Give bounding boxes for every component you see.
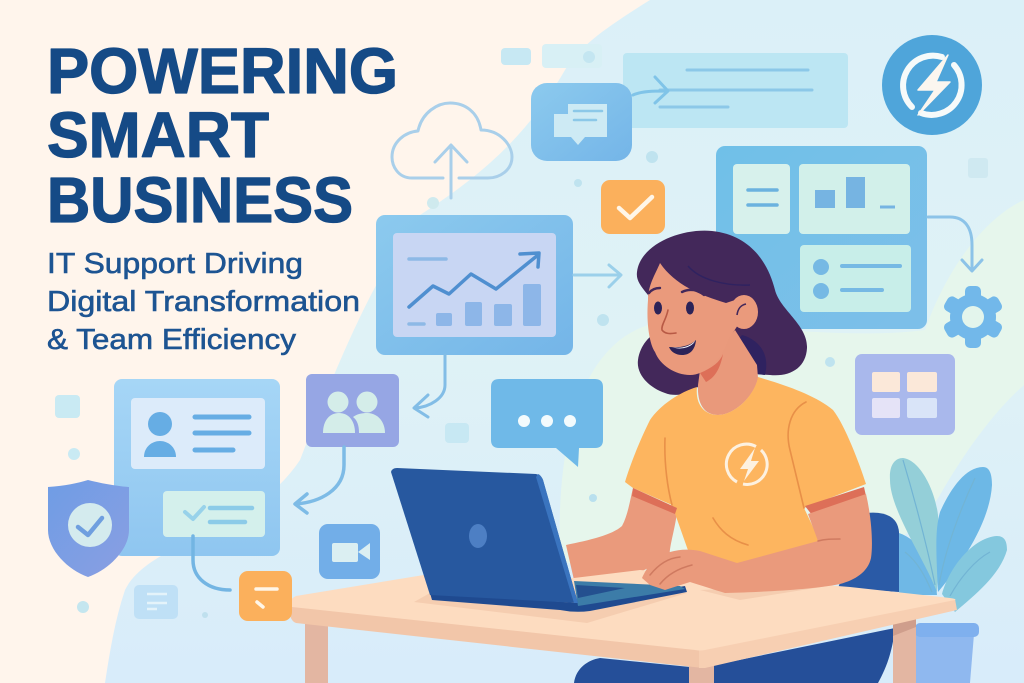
top message box bbox=[623, 53, 848, 128]
icon: small document bbox=[134, 585, 178, 619]
icon: layout grid bbox=[855, 354, 955, 435]
arrow: team to card bbox=[295, 447, 344, 513]
title: POWERING bbox=[47, 35, 398, 107]
arrow: chart to person bbox=[574, 265, 621, 287]
title: SMART bbox=[47, 99, 269, 171]
icon: shirt logo bbox=[726, 444, 767, 484]
panel: dashboard bbox=[716, 146, 927, 329]
icon: brand logo bbox=[882, 35, 982, 135]
decorative small shapes bbox=[55, 44, 988, 618]
title: BUSINESS bbox=[47, 164, 353, 236]
icon: shield bbox=[48, 480, 129, 577]
small orange tile bbox=[239, 571, 292, 621]
icon: chat tile bbox=[531, 83, 632, 161]
hair back bbox=[637, 231, 807, 395]
panel: growth chart bbox=[376, 215, 573, 355]
desk bbox=[290, 570, 957, 683]
person bbox=[566, 231, 866, 580]
subtitle: IT Support Driving bbox=[47, 248, 303, 280]
t-shirt bbox=[625, 377, 866, 568]
chair bbox=[574, 513, 899, 683]
laptop bbox=[391, 468, 687, 612]
icon: orange check bbox=[601, 180, 665, 234]
icon: team bbox=[306, 374, 399, 447]
title bbox=[47, 35, 398, 236]
icon: video bbox=[319, 524, 380, 579]
face bbox=[647, 263, 740, 375]
arrow: chart to team bbox=[414, 355, 445, 417]
subtitle: & Team Efficiency bbox=[47, 324, 297, 356]
icon: gear bbox=[942, 286, 1004, 348]
arrow: dashboard to gear bbox=[928, 217, 982, 271]
subtitle bbox=[47, 248, 360, 356]
panel: profile card bbox=[114, 379, 280, 556]
neck bbox=[698, 330, 758, 415]
arrow: card to orange tile bbox=[193, 536, 230, 590]
arm: right with hand bbox=[642, 494, 872, 593]
subtitle: Digital Transformation bbox=[47, 286, 360, 318]
arrow: chat to box bbox=[633, 77, 668, 103]
plant bbox=[890, 458, 1007, 683]
icon: speech bubble bbox=[491, 379, 603, 467]
icon: cloud upload bbox=[392, 103, 512, 198]
arm: left bbox=[566, 488, 677, 580]
